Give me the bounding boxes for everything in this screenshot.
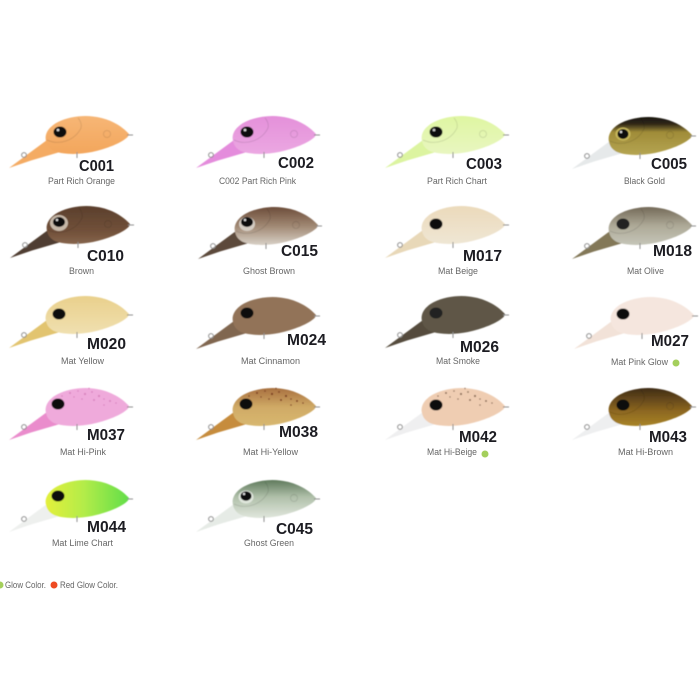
legend: glow colours: [0, 580, 118, 590]
lure: C010 brown: [10, 206, 134, 258]
lure: M026 smoke: [385, 296, 509, 348]
name: Mat Smoke: Mat Smoke: [436, 356, 480, 366]
name: Mat Olive: Mat Olive: [627, 266, 664, 276]
lure: M017 beige: [385, 206, 509, 258]
lure: C045 ghost green: [196, 480, 320, 532]
name: Mat Cinnamon: Mat Cinnamon: [241, 356, 300, 366]
legend: glow colours: Glow Color.: [5, 580, 46, 590]
code: M042: M042: [459, 429, 497, 446]
code: C002: C002: [278, 155, 314, 172]
lure: C005 black gold: [572, 117, 696, 169]
lure: C003 chart: [385, 116, 509, 168]
name: Mat Hi-Yellow: Mat Hi-Yellow: [243, 447, 299, 457]
lure: M043 hi-brown: [572, 388, 696, 440]
name: Mat Pink Glow: Mat Pink Glow: [611, 357, 668, 367]
name: Brown: Brown: [69, 266, 94, 276]
code: C010: C010: [87, 248, 124, 265]
lure: M024 cinnamon: [196, 297, 320, 349]
glow marker: M027: [672, 360, 680, 366]
code: C003: C003: [466, 156, 502, 173]
lure: C001 orange: [9, 116, 133, 168]
code: M044: M044: [87, 519, 126, 536]
name: Mat Hi-Beige: Mat Hi-Beige: [427, 447, 477, 457]
code: M020: M020: [87, 336, 126, 353]
code: M018: M018: [653, 243, 692, 260]
name: Mat Yellow: Mat Yellow: [61, 356, 104, 366]
legend: glow colours: Red Glow Color.: [60, 580, 118, 590]
name: Mat Hi-Pink: Mat Hi-Pink: [60, 447, 106, 457]
name: Ghost Brown: Ghost Brown: [243, 266, 295, 276]
code: C001: C001: [79, 158, 114, 175]
name: Mat Hi-Brown: Mat Hi-Brown: [618, 447, 673, 457]
lure: M038 hi-yellow: [196, 388, 320, 440]
lure: M020 yellow: [9, 296, 133, 348]
code: M038: M038: [279, 424, 318, 441]
name: C002 Part Rich Pink: C002 Part Rich Pink: [219, 176, 296, 186]
name: Mat Lime Chart: Mat Lime Chart: [52, 538, 113, 548]
code: M026: M026: [460, 339, 499, 356]
lure: M018 olive: [572, 207, 696, 259]
code: C015: C015: [281, 243, 318, 260]
name: Part Rich Chart: Part Rich Chart: [427, 176, 487, 186]
name: Black Gold: Black Gold: [624, 176, 665, 186]
name: Mat Beige: Mat Beige: [438, 266, 478, 276]
glow marker: M042: [482, 450, 488, 458]
name: Part Rich Orange: Part Rich Orange: [48, 176, 115, 186]
code: C005: C005: [651, 156, 687, 173]
lure: M044 lime chart: [9, 480, 133, 532]
code: M027: M027: [651, 333, 689, 350]
lure: M027 pink glow: [574, 297, 698, 349]
lure: M037 hi-pink: [9, 388, 133, 440]
lure: C002 pink: [196, 116, 320, 168]
lure: M042 hi-beige: [385, 388, 509, 440]
code: M017: M017: [463, 248, 502, 265]
code: M037: M037: [87, 427, 125, 444]
name: Ghost Green: Ghost Green: [244, 538, 294, 548]
code: M043: M043: [649, 429, 687, 446]
code: C045: C045: [276, 521, 313, 538]
lure: C015 ghost brown: [198, 207, 322, 259]
code: M024: M024: [287, 332, 326, 349]
